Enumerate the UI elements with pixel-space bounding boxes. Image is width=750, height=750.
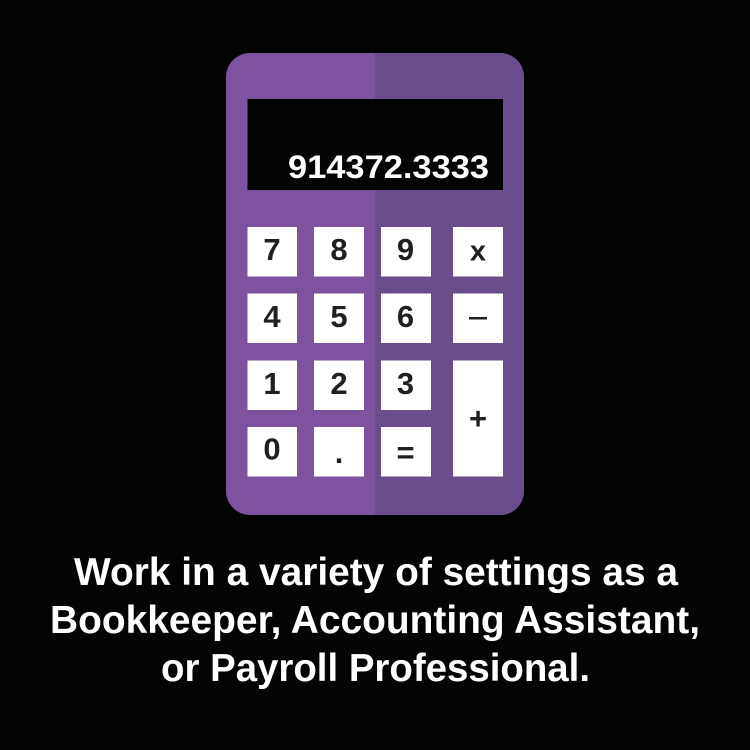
- key 1: 1: [263, 366, 281, 401]
- icon: calculator: [226, 53, 524, 515]
- key 5: 5: [330, 299, 348, 334]
- key 8: 8: [330, 232, 348, 267]
- key 0: 0: [263, 432, 281, 466]
- key minus: [453, 294, 503, 343]
- key 1: [248, 360, 297, 410]
- calculator body: [226, 53, 524, 515]
- key plus: +: [469, 401, 487, 436]
- caption text: Bookkeeper, Accounting Assistant,: [50, 599, 700, 642]
- key 5: [314, 294, 364, 343]
- key 7: 7: [263, 232, 281, 267]
- caption text: Work in a variety of settings as a: [74, 551, 678, 594]
- key multiply: x: [470, 236, 486, 268]
- key 3: [381, 360, 431, 410]
- key 0: [248, 427, 297, 476]
- calculator display: 914372.3333: [288, 149, 489, 185]
- key 4: [248, 294, 297, 343]
- key plus: [453, 360, 503, 476]
- key 2: 2: [330, 366, 348, 401]
- key 7: [248, 227, 297, 276]
- key 2: [314, 360, 364, 410]
- key 6: 6: [397, 299, 414, 334]
- caption text: [50, 551, 700, 690]
- key 6: [381, 294, 431, 343]
- key 9: 9: [397, 232, 414, 267]
- key equals: [381, 427, 431, 476]
- key decimal point: [314, 427, 364, 476]
- key 9: [381, 227, 431, 276]
- key 4: 4: [263, 299, 281, 334]
- key multiply: [453, 227, 503, 276]
- key decimal point: .: [335, 435, 343, 470]
- calculator display: [248, 99, 503, 190]
- key 3: 3: [397, 366, 414, 401]
- key equals: =: [396, 435, 415, 470]
- calculator keypad: [248, 227, 503, 476]
- key 8: [314, 227, 364, 276]
- caption text: or Payroll Professional.: [161, 647, 590, 690]
